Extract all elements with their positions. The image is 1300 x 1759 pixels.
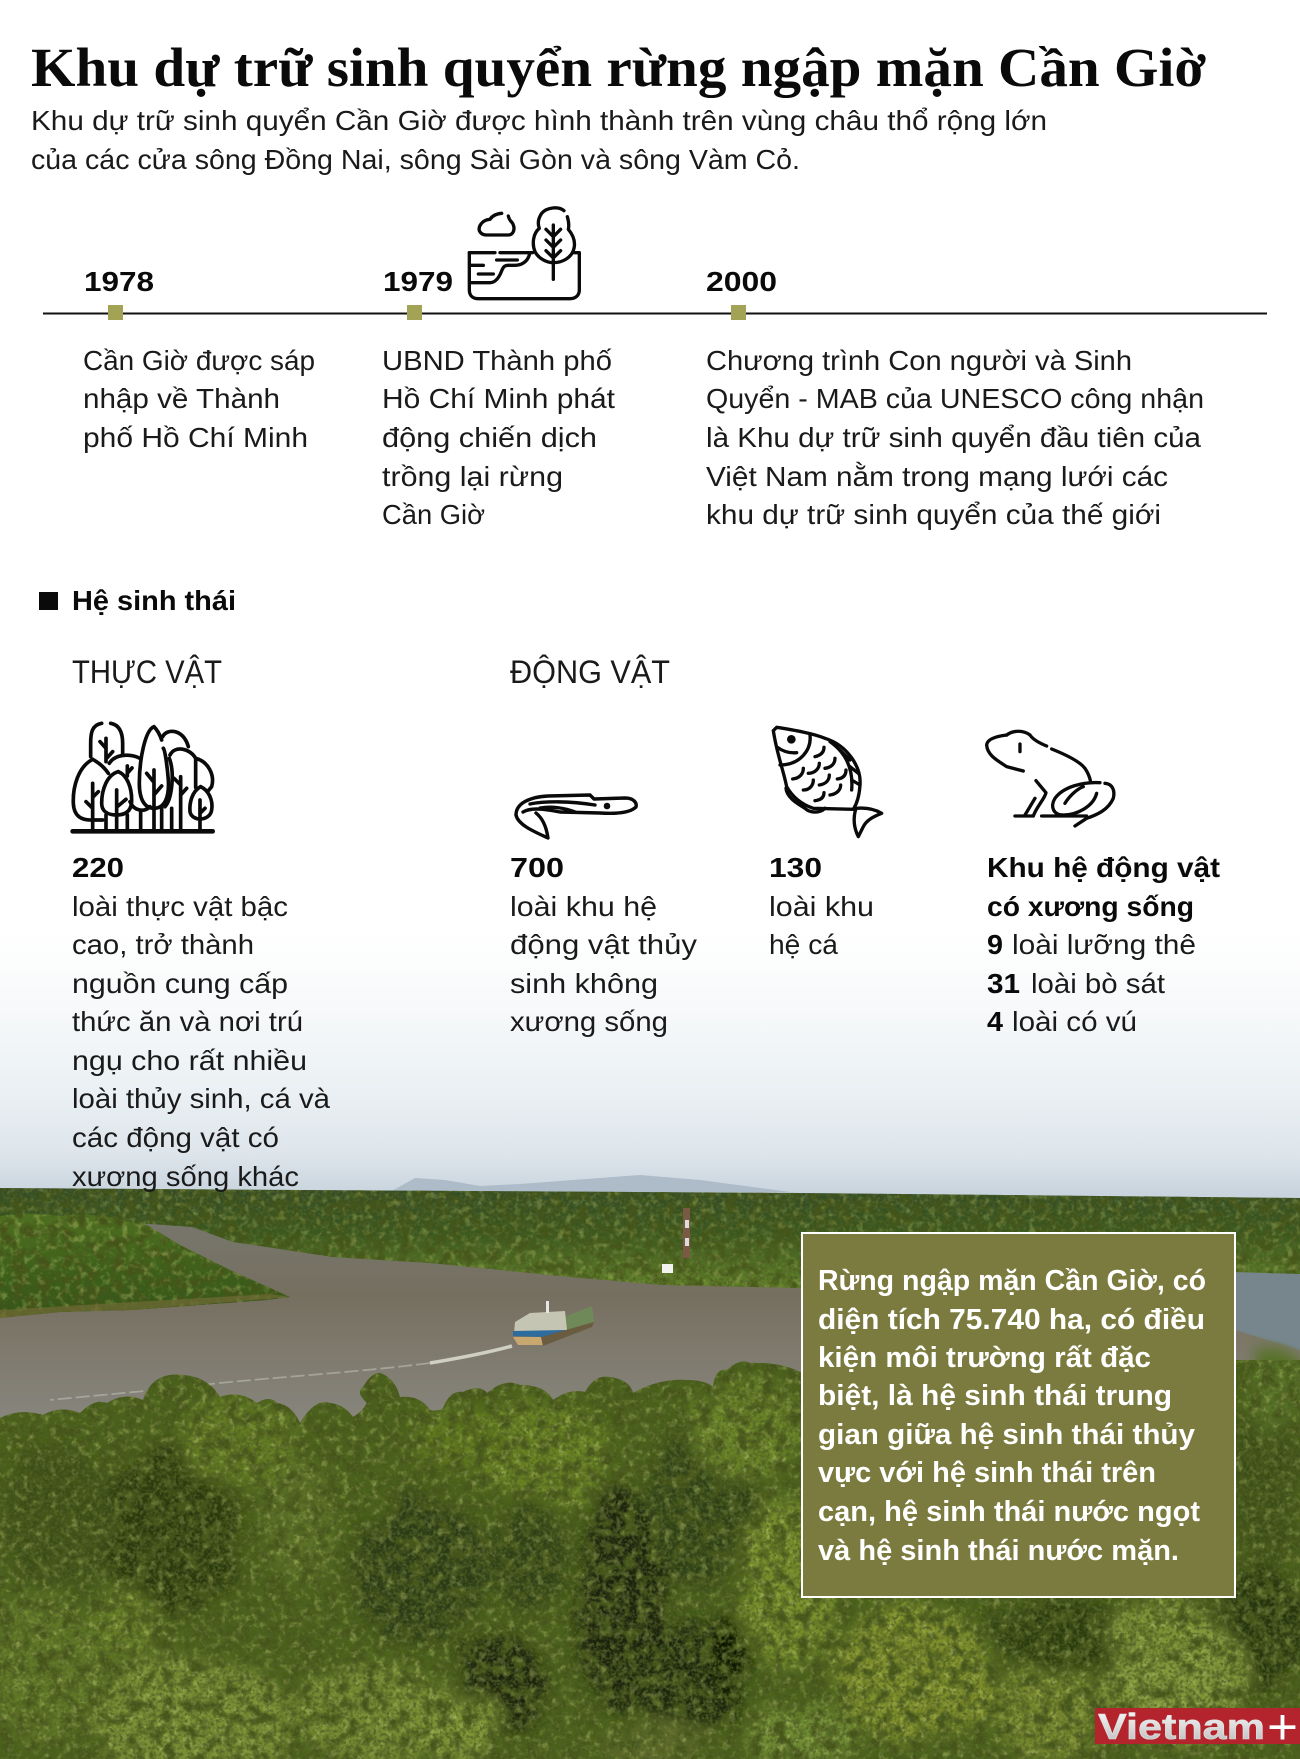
logo: Vietnam+: Vietnam: [1098, 1706, 1265, 1747]
far forest bank: [0, 1185, 1300, 1295]
plants stat: ngụ cho rất nhiều: [72, 1045, 307, 1076]
boat wake: [50, 1346, 512, 1400]
callout box: và hệ sinh thái nước mặn.: [818, 1535, 1179, 1567]
vertebrates stat: loài bò sát: [1031, 968, 1165, 999]
1979 milestone: [382, 266, 615, 530]
heading: plants: THỰC VẬT: [72, 654, 222, 690]
plants stat: nguồn cung cấp: [72, 968, 288, 999]
callout box: [802, 1233, 1235, 1597]
vertebrates stat: 4: [987, 1006, 1003, 1037]
plants stat: thức ăn và nơi trú: [72, 1006, 303, 1037]
1978 milestone: Cần Giờ được sáp: [83, 345, 315, 376]
plants stat: các động vật có: [72, 1122, 279, 1153]
plants stat: cao, trở thành: [72, 929, 254, 960]
icon: landscape with river, cloud and tree: [469, 208, 579, 299]
vertebrates stat: [987, 852, 1220, 1037]
subtitle: [31, 105, 1047, 175]
vertebrates stat: 31: [987, 968, 1020, 999]
logo: Vietnam+: [1095, 1699, 1300, 1755]
1978 milestone: nhập về Thành: [83, 383, 280, 414]
fish stat: [769, 852, 874, 960]
invertebrates stat: xương sống: [510, 1006, 668, 1037]
foreground mangrove canopy: [0, 1345, 1300, 1759]
icon: forest: [73, 723, 213, 831]
2000 milestone: khu dự trữ sinh quyển của thế giới: [706, 499, 1161, 530]
2000 milestone: 2000: [706, 266, 777, 297]
1979 milestone: 1979: [383, 266, 453, 297]
fish stat: loài khu: [769, 891, 874, 922]
invertebrates stat: loài khu hệ: [510, 891, 657, 922]
icon: frog: [987, 731, 1114, 826]
callout box: biệt, là hệ sinh thái trung: [818, 1380, 1172, 1412]
subtitle: Khu dự trữ sinh quyển Cần Giờ được hình thành trên vùng châu thổ rộng lớn: [31, 105, 1047, 136]
left island: [0, 1210, 300, 1320]
icon: fish: [773, 727, 882, 837]
subtitle: của các cửa sông Đồng Nai, sông Sài Gòn và sông Vàm Cỏ.: [31, 144, 800, 175]
2000 milestone: là Khu dự trữ sinh quyển đầu tiên của: [706, 422, 1201, 453]
fish stat: 130: [769, 852, 822, 883]
invertebrates stat: [510, 852, 697, 1037]
callout box: gian giữa hệ sinh thái thủy: [818, 1419, 1195, 1451]
callout box: Rừng ngập mặn Cần Giờ, có: [818, 1265, 1206, 1297]
2000 milestone: [706, 266, 1204, 530]
distant mountains: [390, 1175, 790, 1192]
1978 milestone: phố Hồ Chí Minh: [83, 422, 308, 453]
vertebrates stat: có xương sống: [987, 891, 1194, 922]
1979 milestone: Hồ Chí Minh phát: [382, 383, 615, 414]
2000 milestone: Quyển - MAB của UNESCO công nhận: [706, 383, 1204, 414]
plants stat: xương sống khác: [72, 1161, 299, 1192]
vertebrates stat: loài có vú: [1012, 1006, 1137, 1037]
sky: [0, 930, 1300, 1200]
vertebrates stat: 9: [987, 929, 1003, 960]
callout box: diện tích 75.740 ha, có điều: [818, 1304, 1205, 1336]
vertebrates stat: Khu hệ động vật: [987, 852, 1220, 883]
invertebrates stat: 700: [510, 852, 564, 883]
fish stat: hệ cá: [769, 929, 838, 960]
1979 milestone: UBND Thành phố: [382, 345, 612, 376]
callout box: vực với hệ sinh thái trên: [818, 1457, 1156, 1489]
plants stat: [72, 852, 330, 1192]
callout box: kiện môi trường rất đặc: [818, 1342, 1151, 1374]
2000 milestone: Chương trình Con người và Sinh: [706, 345, 1132, 376]
logo: Vietnam+: +: [1267, 1699, 1298, 1755]
1978 milestone: [83, 266, 315, 453]
heading: animals: ĐỘNG VẬT: [510, 654, 670, 690]
1979 milestone: Cần Giờ: [382, 499, 485, 530]
1978 milestone: 1978: [84, 266, 154, 297]
invertebrates stat: động vật thủy: [510, 929, 697, 960]
plants stat: 220: [72, 852, 124, 883]
invertebrates stat: sinh không: [510, 968, 658, 999]
1979 milestone: động chiến dịch: [382, 422, 597, 453]
timeline: [43, 266, 1267, 530]
vertebrates stat: loài lưỡng thê: [1012, 929, 1196, 960]
background photo: mangrove forest and river: [0, 930, 1300, 1759]
river: [0, 1220, 1300, 1440]
callout box: cạn, hệ sinh thái nước ngọt: [818, 1496, 1200, 1528]
plants stat: loài thủy sinh, cá và: [72, 1083, 330, 1114]
icon: eel: [516, 795, 636, 838]
section heading: ecosystem: Hệ sinh thái: [72, 585, 236, 616]
1979 milestone: trồng lại rừng: [382, 461, 563, 492]
title: Khu dự trữ sinh quyển rừng ngập mặn Cần Giờ: [31, 37, 1207, 98]
radio tower: [662, 1208, 690, 1273]
boat: [513, 1301, 594, 1346]
plants stat: loài thực vật bậc: [72, 891, 288, 922]
2000 milestone: Việt Nam nằm trong mạng lưới các: [706, 461, 1168, 492]
